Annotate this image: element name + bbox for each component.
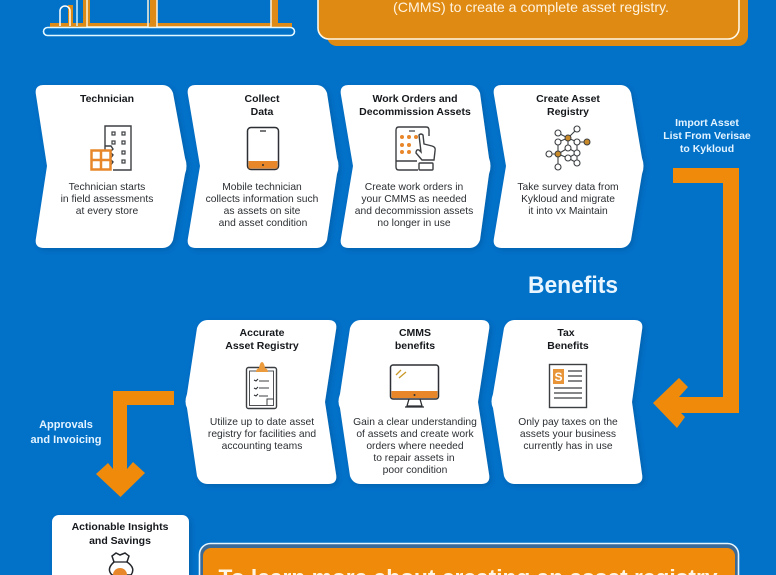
heading: CMMS benefits: benefits: [395, 340, 435, 352]
illustration: building base: [44, 0, 294, 36]
heading: Collect Data: Data: [251, 106, 274, 118]
icon: tax document: [550, 364, 586, 408]
text: Technician description: in field assessments: [61, 194, 153, 205]
text: Collect Data description: collects information such: [206, 194, 319, 205]
label: Import Asset List: to Kykloud: [680, 143, 734, 155]
text: Technician description: Technician starts: [69, 182, 145, 193]
text: Work Orders description: Create work orders in: [365, 182, 463, 193]
panel: Tax Benefits: [492, 320, 642, 484]
heading: Actionable Insights: and Savings: [89, 535, 151, 547]
text: Collect Data description: Mobile technician: [222, 182, 302, 193]
text: CMMS benefits description: Gain a clear understanding: [353, 417, 477, 428]
label: Approvals and Invoicing: and Invoicing: [31, 434, 101, 446]
text: Tax Benefits description: Only pay taxes on the: [518, 417, 618, 428]
panel: Technician: [36, 85, 186, 248]
panel: Accurate Asset Registry: [186, 320, 336, 484]
heading: Create Asset Registry: Create Asset: [536, 93, 600, 105]
heading: Tax Benefits: Tax: [557, 327, 575, 339]
label: Approvals and Invoicing: Approvals: [39, 419, 93, 431]
heading: Actionable Insights: Actionable Insights: [72, 521, 169, 533]
text: Work Orders description: your CMMS as needed: [361, 194, 467, 205]
label: Import Asset List: Import Asset: [675, 117, 739, 129]
heading: CMMS benefits: CMMS: [399, 327, 431, 339]
heading: Collect Data: Collect: [244, 93, 280, 105]
heading: Accurate Asset Registry: Asset Registry: [225, 340, 299, 352]
text: Collect Data description: as assets on site: [224, 206, 301, 217]
text: Work Orders description: no longer in use: [377, 218, 451, 229]
heading: Benefits: Benefits: [528, 272, 618, 299]
panel: Collect Data: [188, 85, 338, 248]
text: CMMS benefits description: of assets and create work: [356, 429, 475, 440]
panel: Create Asset Registry: [494, 85, 644, 248]
text: Accurate Asset Registry description: registry for facilities and: [208, 429, 316, 440]
text: CMMS benefits description: to repair assets in: [373, 453, 455, 464]
heading: Work Orders: Decommission Assets: [359, 106, 471, 118]
text: Accurate Asset Registry description: Utilize up to date asset: [210, 417, 314, 428]
panel: Actionable Insights: [52, 515, 189, 575]
icon: money bag: [109, 553, 133, 575]
icon: buildings: [91, 126, 131, 170]
icon: monitor: [390, 365, 438, 407]
icon: clipboard: [246, 362, 276, 408]
label: Import Asset List: List From Verisae: [663, 130, 751, 142]
panel: CMMS benefits: [338, 320, 489, 484]
text: Technician description: at every store: [76, 206, 138, 217]
callout: learn more: [200, 544, 738, 575]
text: CMMS benefits description: orders where needed: [366, 441, 464, 452]
text: Tax Benefits description: assets your business: [520, 429, 616, 440]
heading: Work Orders: Work Orders and: [372, 93, 458, 105]
heading: Technician: Technician: [80, 93, 134, 105]
callout: top CMMS box: [318, 0, 748, 46]
text: Create Asset Registry description: Take survey data from: [517, 182, 619, 193]
heading: Accurate Asset Registry: Accurate: [240, 327, 285, 339]
text: Accurate Asset Registry description: accounting teams: [222, 441, 302, 452]
icon: tablet with hand: [396, 127, 435, 170]
heading: Create Asset Registry: Registry: [547, 106, 589, 118]
icon: network: [546, 126, 590, 170]
text: Create Asset Registry description: it into vx Maintain: [528, 206, 608, 217]
panel: Work Orders: [341, 85, 490, 248]
text: Tax Benefits description: currently has in use: [523, 441, 613, 452]
icon: tax document: S: [554, 370, 563, 384]
heading: Tax Benefits: Benefits: [547, 340, 589, 352]
text: CMMS benefits description: poor condition: [383, 465, 448, 476]
text: Collect Data description: and asset condition: [219, 218, 308, 229]
text: Create Asset Registry description: Kykloud and migrate: [521, 194, 615, 205]
arrow: import to benefits: [653, 168, 739, 428]
text: Work Orders description: and decommission assets: [355, 206, 473, 217]
arrow: to insights: [96, 391, 174, 497]
icon: phone: [248, 128, 278, 170]
